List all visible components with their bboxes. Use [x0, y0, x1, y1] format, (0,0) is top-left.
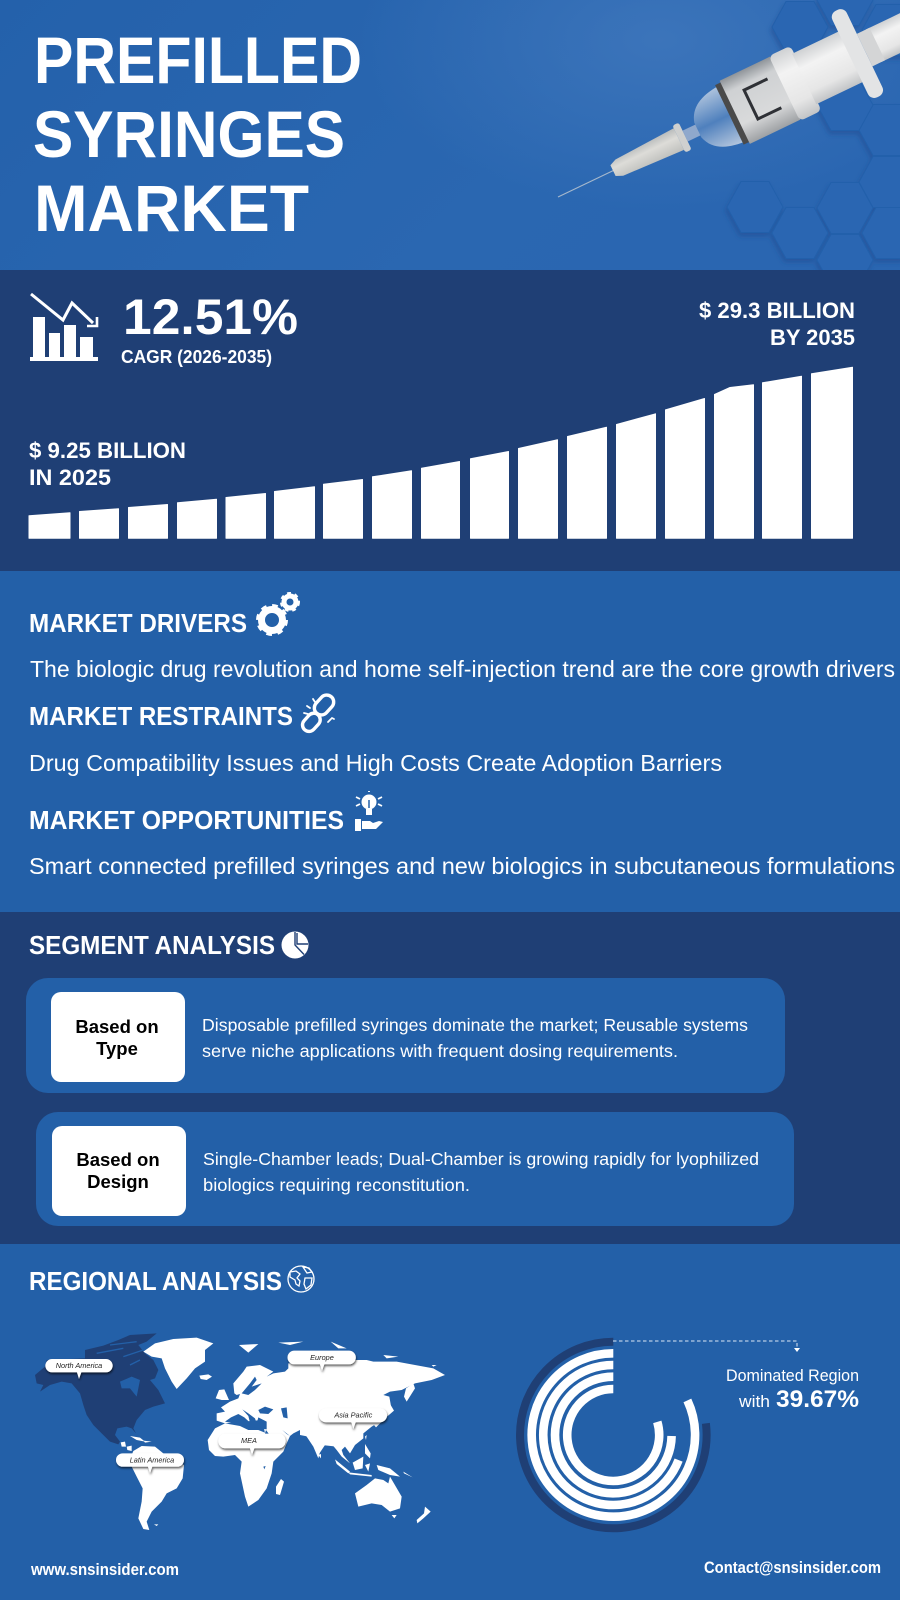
2035 value label — [699, 298, 855, 350]
text: type description: Disposable prefilled syringes dominate the market; Reusable systems — [202, 1015, 748, 1035]
icon: idea in hand — [355, 791, 383, 831]
callout: MEA — [218, 1434, 286, 1455]
callout: North America: North America — [56, 1361, 102, 1370]
panel: header background — [308, 0, 900, 270]
label box: based on design — [52, 1126, 186, 1216]
label box: based on type: Based on — [75, 1016, 159, 1037]
title: SYRINGES — [33, 97, 345, 171]
footer: contact: Contact@snsinsider.com — [704, 1559, 881, 1577]
heading: segment analysis: SEGMENT ANALYSIS — [29, 932, 275, 960]
heading: regional analysis: REGIONAL ANALYSIS — [29, 1268, 282, 1296]
icon: gears — [258, 594, 298, 634]
callout: dominated region: 39.67% — [776, 1386, 859, 1413]
callout: Latin America: Latin America — [130, 1456, 174, 1465]
callout: dominated region: with — [738, 1392, 770, 1411]
heading: market opportunities: MARKET OPPORTUNITIES — [29, 807, 344, 835]
label box: based on type — [51, 992, 185, 1082]
icon: globe — [288, 1266, 314, 1292]
icon: syringe — [537, 0, 900, 240]
panel: market size band — [0, 270, 900, 571]
heading: market drivers: MARKET DRIVERS — [29, 610, 247, 638]
panel: drivers, restraints, opportunities — [0, 571, 900, 912]
region: North America — [35, 1333, 165, 1444]
panel: regional analysis — [0, 1244, 900, 1600]
callout: dominated region: Dominated Region — [726, 1366, 859, 1385]
title — [33, 23, 362, 245]
text: opportunities description: Smart connected prefilled syringes and new biologics in subcutaneous formulations — [29, 853, 895, 879]
2025 value label — [29, 438, 186, 490]
2025 value label: IN 2025 — [29, 465, 111, 490]
bar chart: market growth — [29, 367, 852, 538]
arrow: dashed leader to region label — [613, 1341, 800, 1352]
panel: based on type — [26, 978, 785, 1093]
label box: based on design: Based on — [76, 1149, 160, 1170]
callout: dominated region — [726, 1366, 859, 1413]
CAGR stat: 12.51% — [123, 289, 298, 345]
panel: segment analysis — [0, 912, 900, 1244]
panel: based on design — [36, 1112, 794, 1226]
icon: market chart — [30, 294, 98, 361]
callout: Asia Pacific — [319, 1408, 387, 1429]
title: PREFILLED — [34, 23, 362, 97]
text: type description: serve niche applications with frequent dosing requirements. — [202, 1041, 678, 1061]
text: restraints description: Drug Compatibility Issues and High Costs Create Adoption Barriers — [29, 750, 722, 776]
title: MARKET — [34, 171, 309, 245]
icon: broken link — [300, 692, 337, 734]
world map — [35, 1333, 445, 1530]
text: drivers description: The biologic drug revolution and home self-injection trend are the core growth drivers — [30, 656, 895, 682]
radial chart: dominated region share — [520, 1342, 707, 1528]
heading: market restraints: MARKET RESTRAINTS — [29, 703, 293, 731]
text: type description — [202, 1015, 748, 1061]
text: design description: Single-Chamber leads; Dual-Chamber is growing rapidly for lyophilized — [203, 1149, 759, 1169]
2035 value label: $ 29.3 BILLION — [699, 298, 855, 323]
text: design description — [203, 1149, 759, 1195]
callout: Europe: Europe — [310, 1353, 334, 1362]
icon: pie chart — [282, 932, 308, 958]
callout: MEA: MEA — [241, 1436, 257, 1445]
label box: based on design: Design — [87, 1171, 149, 1192]
text: design description: biologics requiring reconstitution. — [203, 1175, 470, 1195]
CAGR stat — [121, 289, 298, 367]
CAGR stat: CAGR (2026-2035) — [121, 347, 272, 367]
2035 value label: BY 2035 — [770, 325, 855, 350]
footer: website: www.snsinsider.com — [30, 1561, 179, 1579]
label box: based on type: Type — [96, 1038, 138, 1059]
icon: honeycomb pattern — [727, 0, 900, 286]
callout: Latin America — [116, 1453, 184, 1473]
callout: Europe — [287, 1351, 356, 1371]
callout: North America — [45, 1359, 113, 1379]
2025 value label: $ 9.25 BILLION — [29, 438, 186, 463]
callout: Asia Pacific: Asia Pacific — [333, 1411, 373, 1420]
